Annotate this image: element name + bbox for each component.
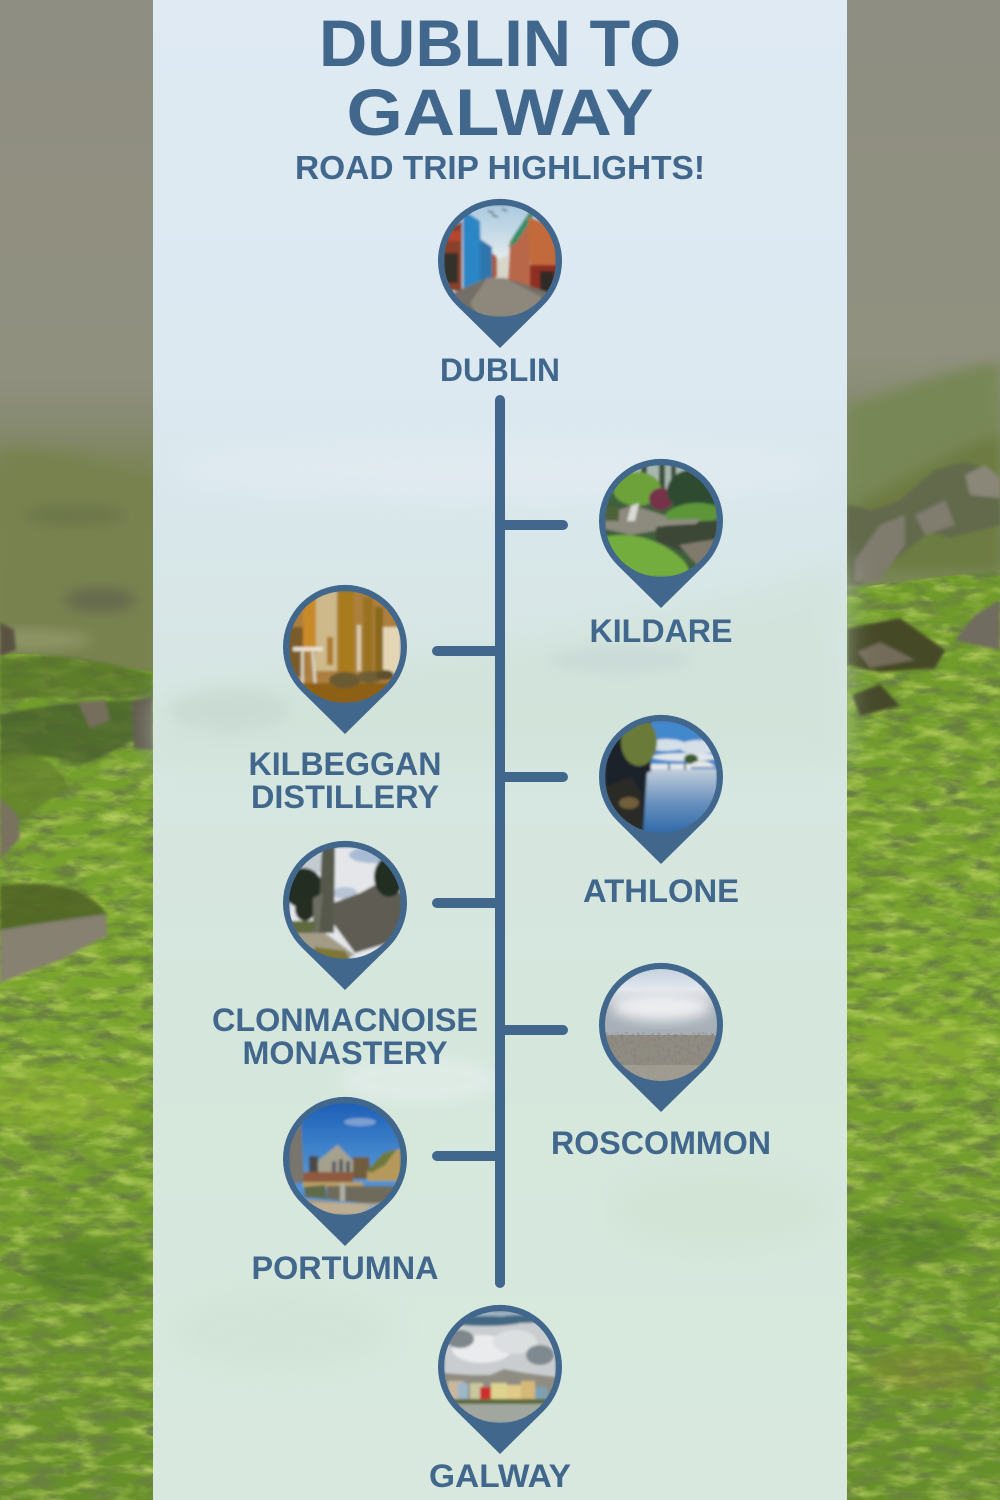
stop: Portumna xyxy=(252,1097,438,1286)
photo: Athlone river xyxy=(605,718,720,833)
translucent centre panel xyxy=(153,0,847,1500)
pin marker: Dublin xyxy=(438,199,562,348)
pin marker: Clonmacnoise xyxy=(283,841,407,990)
label: Kilbeggan Distillery: DISTILLERY xyxy=(251,779,439,815)
label: Portumna: PORTUMNA xyxy=(252,1250,438,1286)
label: Kildare: KILDARE xyxy=(590,613,732,649)
stop: Galway xyxy=(429,1305,571,1494)
label: Galway: GALWAY xyxy=(429,1458,571,1494)
pin marker: Athlone xyxy=(599,715,723,864)
stop: Clonmacnoise Monastery xyxy=(212,841,478,1071)
label: Kilbeggan Distillery xyxy=(248,746,442,815)
label: Dublin: DUBLIN xyxy=(440,352,560,388)
photo: Dublin street xyxy=(444,205,556,317)
stop: Dublin xyxy=(438,199,562,388)
title: DUBLIN TO xyxy=(319,6,681,80)
photo: Kildare garden xyxy=(605,465,723,577)
label: Clonmacnoise Monastery xyxy=(212,1002,478,1071)
pin marker: Portumna xyxy=(283,1097,407,1246)
stop: Roscommon xyxy=(551,963,771,1161)
photo: Portumna church xyxy=(289,1103,401,1215)
label: Kilbeggan Distillery: KILBEGGAN xyxy=(248,746,442,782)
pin marker: Kildare xyxy=(599,459,723,608)
stop: Kildare xyxy=(590,459,732,649)
photo: Roscommon view xyxy=(605,969,717,1081)
title: ROAD TRIP HIGHLIGHTS! xyxy=(295,149,705,186)
stop: Kilbeggan Distillery xyxy=(248,585,442,815)
title: GALWAY xyxy=(346,75,654,149)
photo: Galway harbour xyxy=(444,1311,556,1423)
label: Roscommon: ROSCOMMON xyxy=(551,1125,771,1161)
title xyxy=(295,6,705,186)
label: Clonmacnoise Monastery: MONASTERY xyxy=(242,1035,448,1071)
label: Clonmacnoise Monastery: CLONMACNOISE xyxy=(212,1002,478,1038)
pin marker: Kilbeggan xyxy=(283,585,407,734)
photo: Clonmacnoise ruins xyxy=(283,847,404,959)
photo: Kilbeggan stills xyxy=(289,591,401,703)
label: Athlone: ATHLONE xyxy=(583,873,739,909)
timeline spine with branches xyxy=(437,400,563,1283)
pin marker: Galway xyxy=(438,1305,562,1454)
stop: Athlone xyxy=(583,715,739,909)
pin marker: Roscommon xyxy=(599,963,723,1112)
